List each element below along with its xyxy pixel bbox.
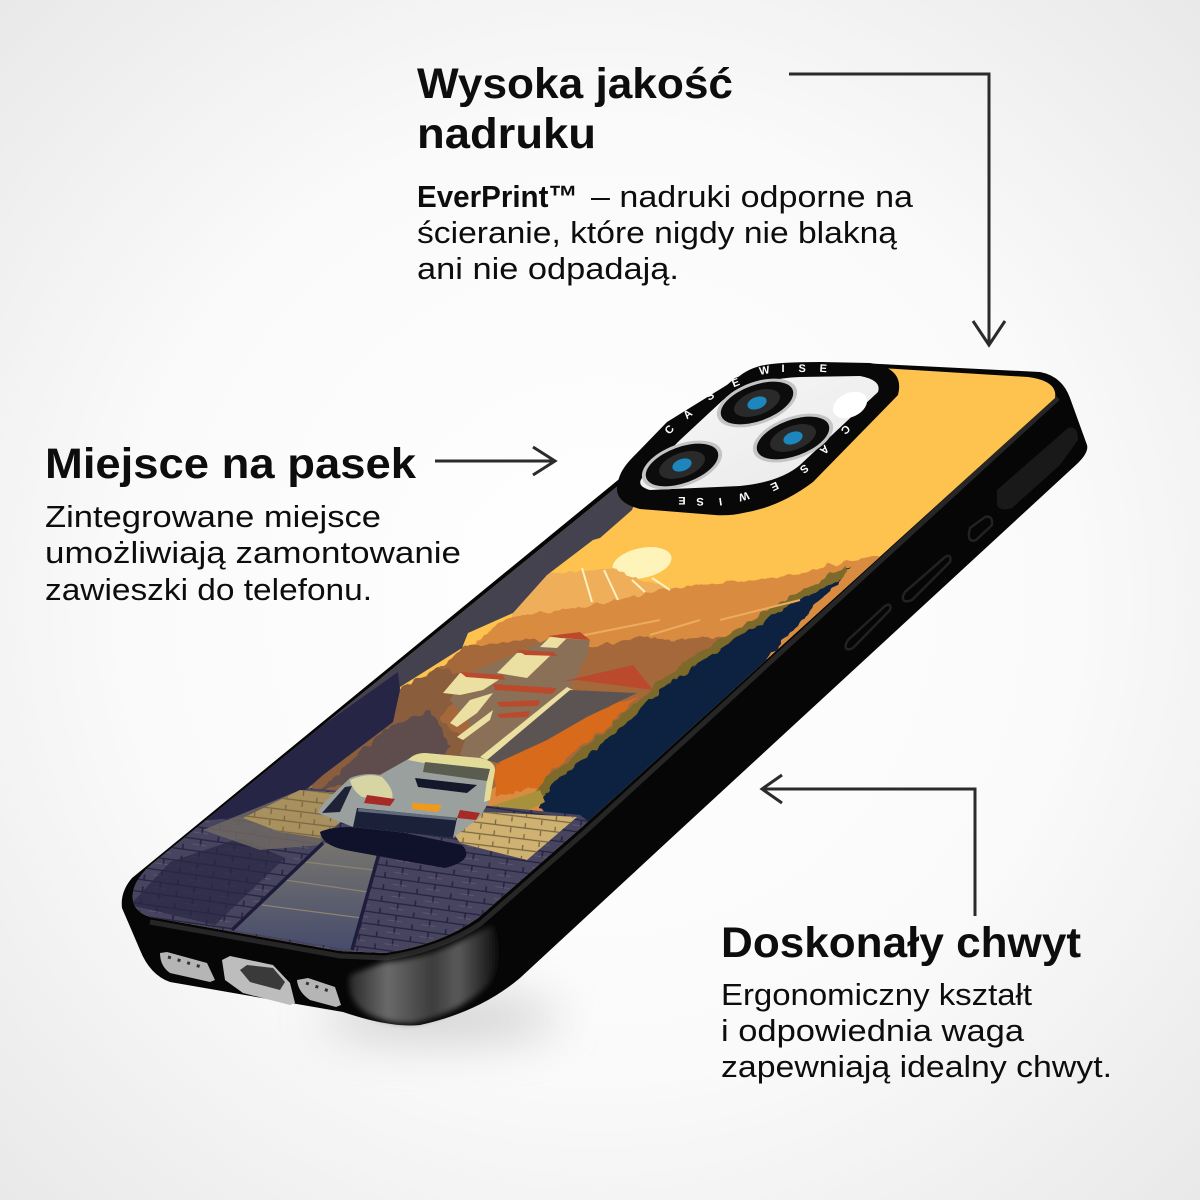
- small red roofs: [460, 632, 590, 718]
- rough landscape layers: [300, 556, 880, 860]
- flash: [829, 387, 871, 423]
- lens right: [746, 404, 840, 472]
- strap slot: [997, 428, 1078, 509]
- description: EverPrint™: [417, 179, 578, 214]
- lens left: [635, 431, 729, 499]
- lit road right: [456, 812, 577, 860]
- grass by road: [491, 790, 545, 810]
- glossy corner: [349, 925, 498, 1023]
- bumper: [353, 808, 457, 838]
- heading: Miejsce na pasek: [45, 440, 416, 488]
- car cream fender: [350, 775, 393, 800]
- ring lettering: E: [730, 376, 742, 390]
- dark lower-left road: [130, 838, 285, 925]
- slab dark cracks: [232, 843, 380, 950]
- road shadow base: [132, 788, 588, 953]
- grey wall: [487, 690, 637, 763]
- rock wall shade: [165, 672, 400, 860]
- right speaker: [297, 978, 341, 1007]
- lit brick lines: [243, 790, 577, 860]
- ring lettering: E: [678, 494, 686, 506]
- car silhouette: [318, 753, 495, 838]
- description: umożliwiają zamontowanie: [45, 535, 461, 570]
- brick texture: [134, 788, 588, 952]
- lit road left: [243, 790, 350, 838]
- description: Zintegrowane miejsce: [45, 499, 381, 534]
- charging and speaker ports: [160, 952, 341, 1007]
- callout: grip: [721, 919, 1112, 1084]
- bumper stripe: [358, 810, 456, 819]
- ring lettering: I: [718, 495, 723, 507]
- orange trees: [493, 697, 637, 795]
- description: ścieranie, które nigdy nie blakną: [417, 215, 898, 250]
- lens top: [710, 369, 804, 437]
- pale far hill: [510, 568, 674, 618]
- ring lettering: E: [768, 479, 780, 493]
- stone slab path: [232, 843, 380, 950]
- building base: [450, 638, 590, 760]
- ring lettering: A: [817, 442, 831, 456]
- lower brown hill: [310, 667, 490, 791]
- camera bump: [617, 362, 899, 515]
- camera ring: [617, 362, 899, 515]
- phone ground shadow: [320, 996, 560, 1040]
- ring lettering: C: [838, 422, 852, 436]
- heading: Wysoka jakość: [417, 60, 733, 108]
- rock wall: [132, 486, 634, 904]
- slab joints: [262, 862, 374, 918]
- mid lit road: [203, 790, 324, 850]
- description: i odpowiednia waga: [721, 1013, 1025, 1048]
- sun: [612, 547, 672, 579]
- purple hill: [320, 710, 450, 790]
- tail lights: [364, 795, 480, 820]
- phone case illustration: [100, 350, 1100, 1025]
- car roof highlight: [408, 753, 495, 802]
- description: – nadruki odporne na: [591, 179, 914, 214]
- sun streaks: [582, 568, 670, 602]
- case body: [122, 363, 1087, 1025]
- speaker holes: [168, 957, 332, 992]
- camera window: [640, 376, 879, 490]
- cream faces: [443, 637, 573, 760]
- description: [45, 499, 461, 607]
- large red roof: [560, 665, 653, 690]
- arrow: print quality: [789, 74, 1005, 345]
- printed artwork: [132, 368, 1056, 953]
- ring lettering: [663, 363, 852, 507]
- ring lettering: E: [819, 363, 827, 375]
- rear window: [423, 762, 490, 781]
- engine vent: [415, 778, 477, 793]
- usb-c port: [222, 956, 295, 1005]
- description: [721, 977, 1112, 1084]
- car shadow: [320, 827, 466, 868]
- buildings: [443, 632, 653, 763]
- car side window: [322, 786, 352, 813]
- ring lettering: S: [704, 389, 717, 403]
- left speaker: [160, 952, 215, 982]
- callout: print quality: [417, 60, 914, 286]
- ring lettering: W: [758, 364, 771, 378]
- description: zapewniają idealny chwyt.: [721, 1049, 1112, 1084]
- case rim: [150, 398, 1058, 958]
- car: [318, 753, 495, 838]
- ring lettering: S: [797, 461, 810, 475]
- distant forest hills: [438, 636, 724, 789]
- arrow: grip: [762, 775, 975, 916]
- ring lettering: W: [737, 489, 750, 503]
- hill highlights: [560, 600, 800, 640]
- description: zawieszki do telefonu.: [45, 572, 372, 607]
- description: Ergonomiczny kształt: [721, 977, 1032, 1012]
- ring lettering: S: [696, 495, 704, 507]
- ring lettering: C: [663, 423, 677, 437]
- description: [417, 179, 914, 286]
- number plate: [412, 803, 442, 812]
- yellow sky: [132, 368, 1056, 953]
- arrow: strap slot: [435, 447, 555, 475]
- callout: strap slot: [45, 440, 461, 607]
- forest olive edge: [540, 570, 848, 795]
- heading: nadruku: [417, 110, 596, 158]
- orange mountain: [472, 556, 880, 844]
- forest slope: [538, 566, 853, 830]
- heading: Doskonały chwyt: [721, 919, 1081, 967]
- ring lettering: I: [781, 363, 785, 375]
- description: ani nie odpadają.: [417, 251, 679, 286]
- heading: [417, 60, 733, 158]
- side buttons: [846, 517, 992, 649]
- usb-c opening: [240, 965, 285, 990]
- ring lettering: A: [681, 408, 695, 422]
- ring lettering: S: [798, 363, 806, 375]
